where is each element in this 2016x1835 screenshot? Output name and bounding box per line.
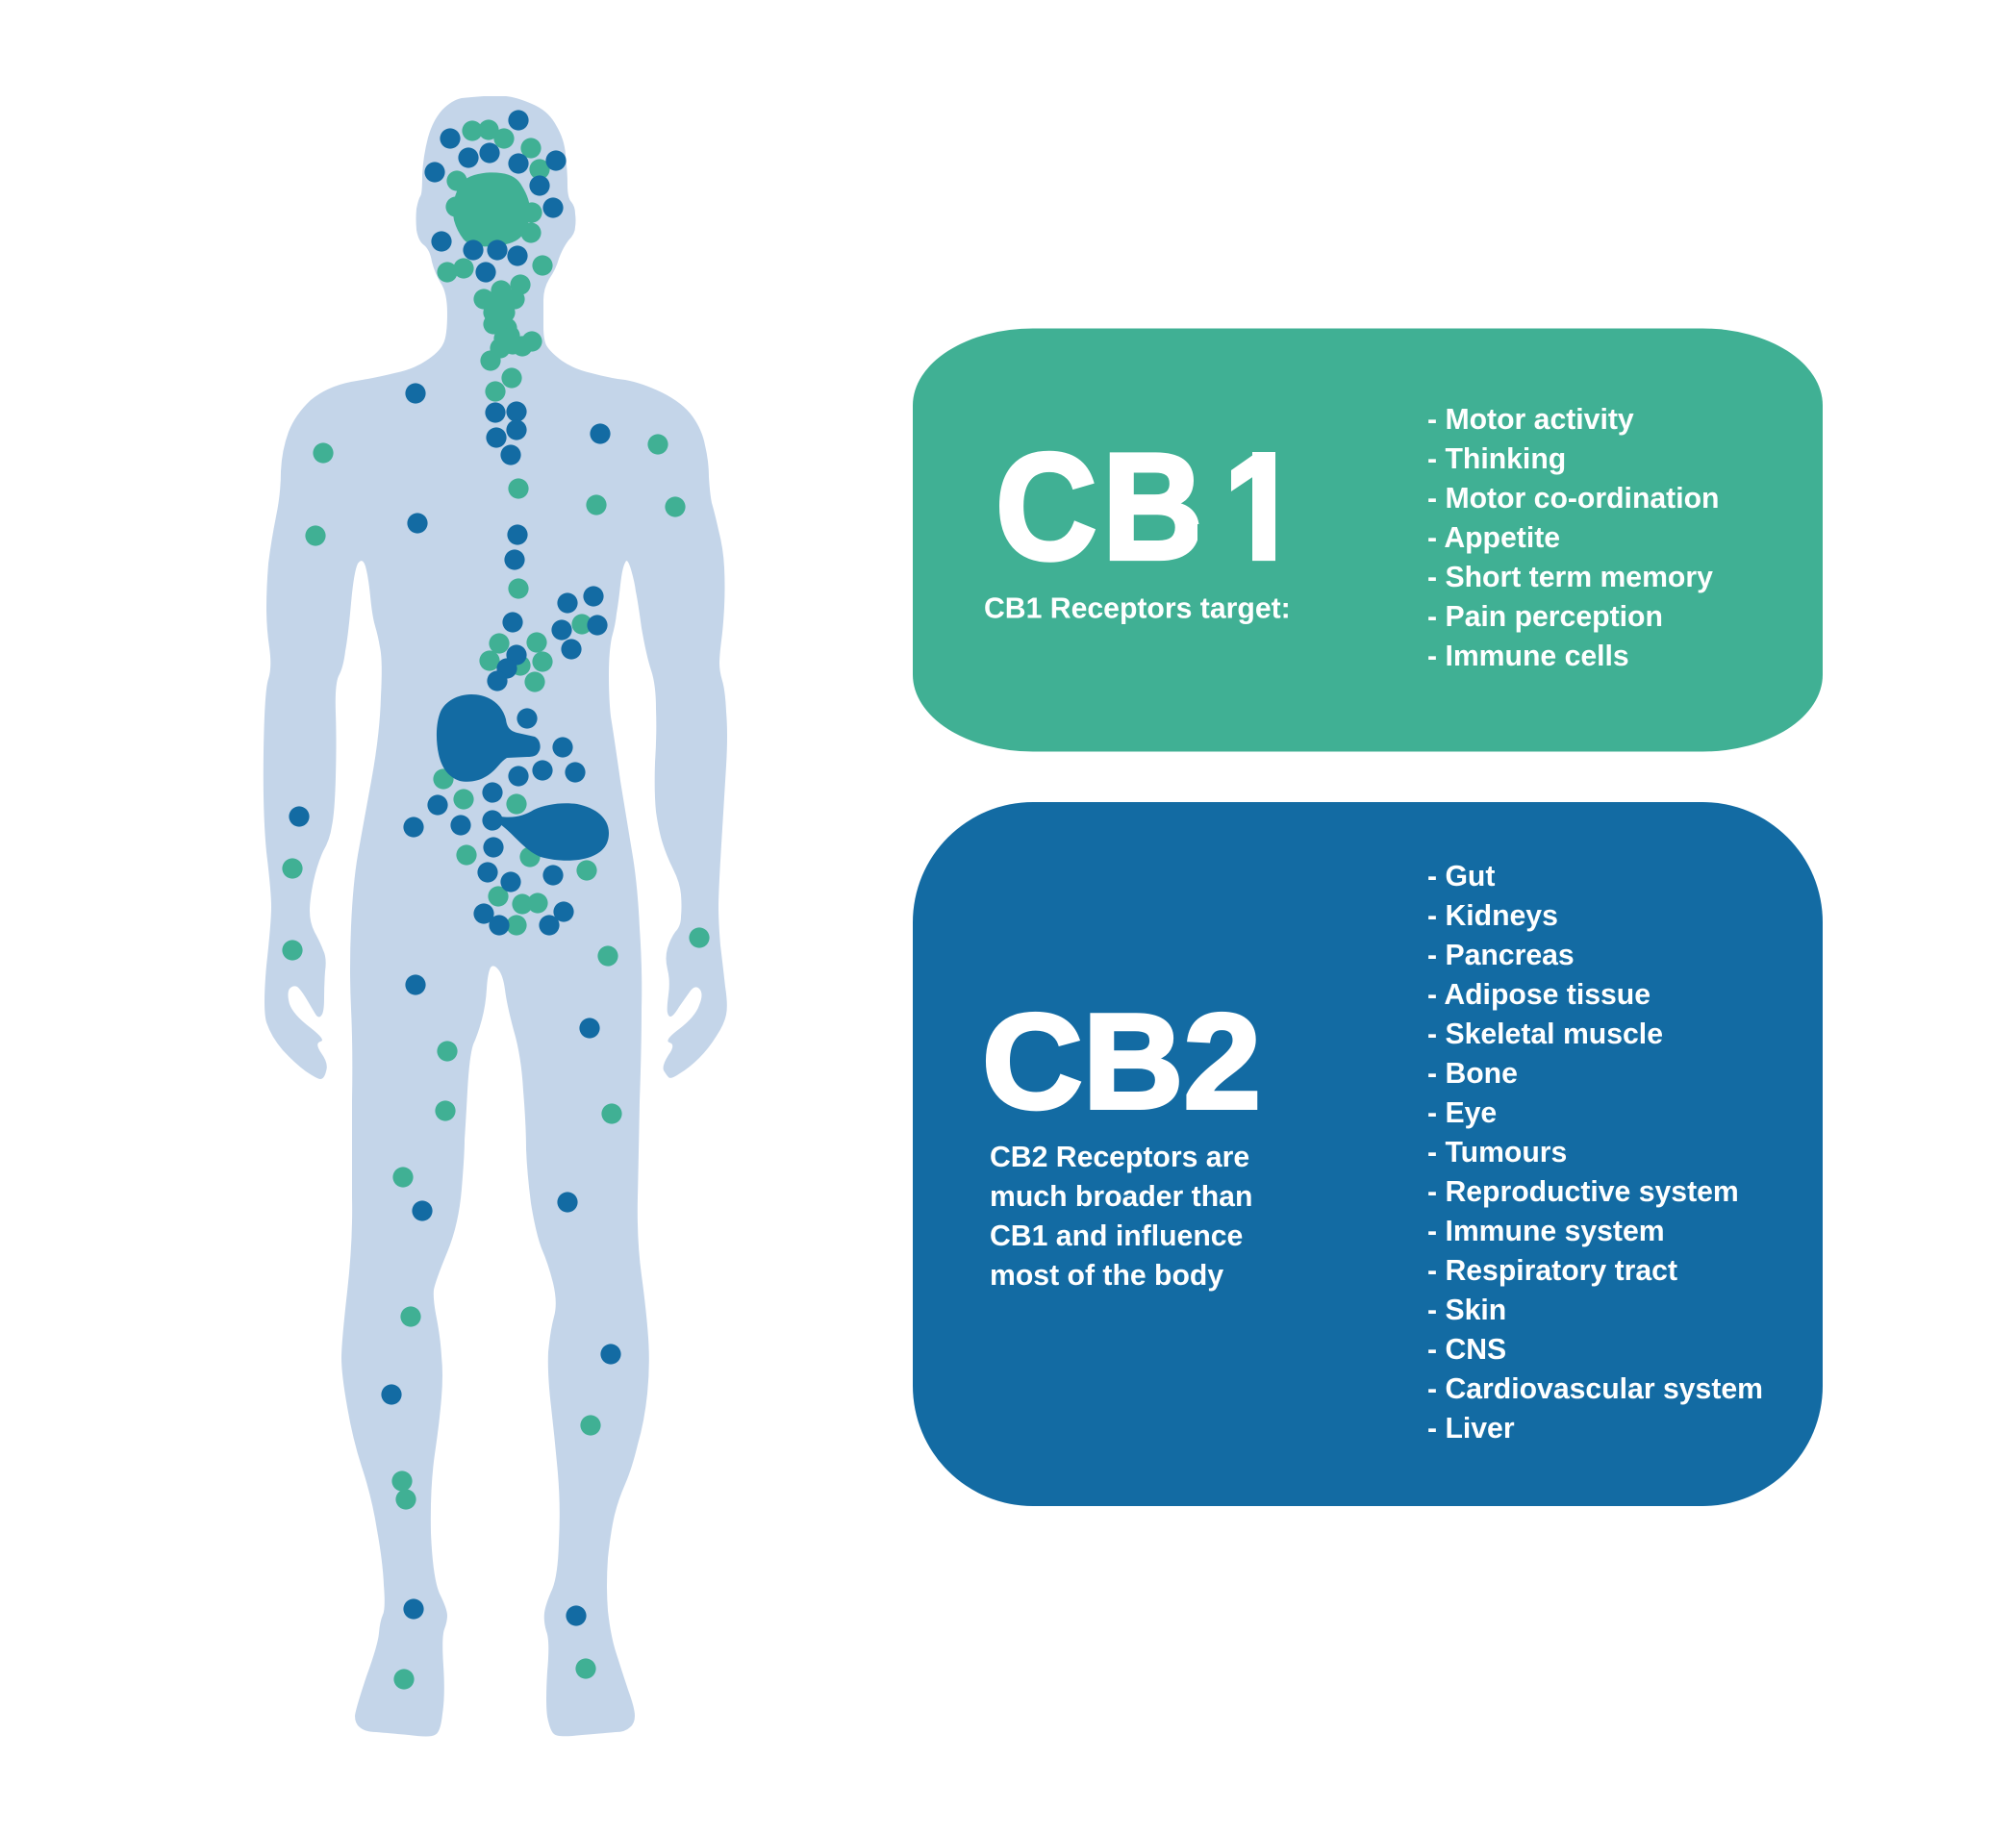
list: CB1 targets: - Motor activity bbox=[1427, 404, 1634, 436]
list: CB1 targets bbox=[1427, 404, 1720, 672]
list: CB2 targets: - Skin bbox=[1427, 1295, 1506, 1326]
list: CB2 targets: - Eye bbox=[1427, 1097, 1497, 1129]
text: CB2 description: much broader than bbox=[990, 1181, 1252, 1213]
text: CB2 description: most of the body bbox=[990, 1260, 1223, 1292]
organ: stomach bbox=[500, 803, 609, 861]
text: CB2 description: CB1 and influence bbox=[990, 1220, 1243, 1252]
list: CB2 targets: - Respiratory tract bbox=[1427, 1255, 1677, 1287]
list: CB2 targets: - Bone bbox=[1427, 1058, 1518, 1090]
list: CB1 targets: - Motor co-ordination bbox=[1427, 483, 1720, 515]
text: CB2 description: CB2 Receptors are bbox=[990, 1142, 1249, 1173]
list: CB1 targets: - Thinking bbox=[1427, 443, 1566, 475]
heading: CB1: CB1 bbox=[995, 422, 1301, 591]
organ: liver bbox=[437, 694, 541, 782]
list: CB2 targets bbox=[1427, 861, 1763, 1445]
text: CB1 receptors target: CB1 Receptors target: bbox=[984, 592, 1291, 625]
list: CB2 targets: - Tumours bbox=[1427, 1137, 1567, 1169]
list: CB1 targets: - Pain perception bbox=[1427, 601, 1663, 633]
list: CB1 targets: - Short term memory bbox=[1427, 562, 1713, 593]
list: CB2 targets: - Pancreas bbox=[1427, 940, 1575, 971]
list: CB2 targets: - Adipose tissue bbox=[1427, 979, 1651, 1011]
list: CB2 targets: - Cardiovascular system bbox=[1427, 1373, 1763, 1405]
list: CB2 targets: - Skeletal muscle bbox=[1427, 1018, 1663, 1050]
list: CB1 targets: - Immune cells bbox=[1427, 641, 1629, 672]
list: CB2 targets: - Gut bbox=[1427, 861, 1495, 892]
list: CB2 targets: - Immune system bbox=[1427, 1216, 1665, 1247]
human body diagram bbox=[264, 96, 727, 1737]
panel: CB1 bbox=[913, 329, 1823, 752]
text: CB2 description bbox=[990, 1142, 1252, 1292]
list: CB2 targets: - Kidneys bbox=[1427, 900, 1558, 932]
list: CB1 targets: - Appetite bbox=[1427, 522, 1560, 554]
heading: CB2: CB2 bbox=[982, 987, 1261, 1138]
list: CB2 targets: - Reproductive system bbox=[1427, 1176, 1739, 1208]
panel: CB2 bbox=[913, 802, 1823, 1506]
blue CB2 receptor dots bbox=[289, 110, 621, 1626]
body silhouette bbox=[264, 96, 727, 1737]
list: CB2 targets: - CNS bbox=[1427, 1334, 1506, 1366]
green CB1 receptor dots bbox=[282, 119, 710, 1690]
list: CB2 targets: - Liver bbox=[1427, 1413, 1515, 1445]
brain cluster bbox=[453, 172, 530, 246]
